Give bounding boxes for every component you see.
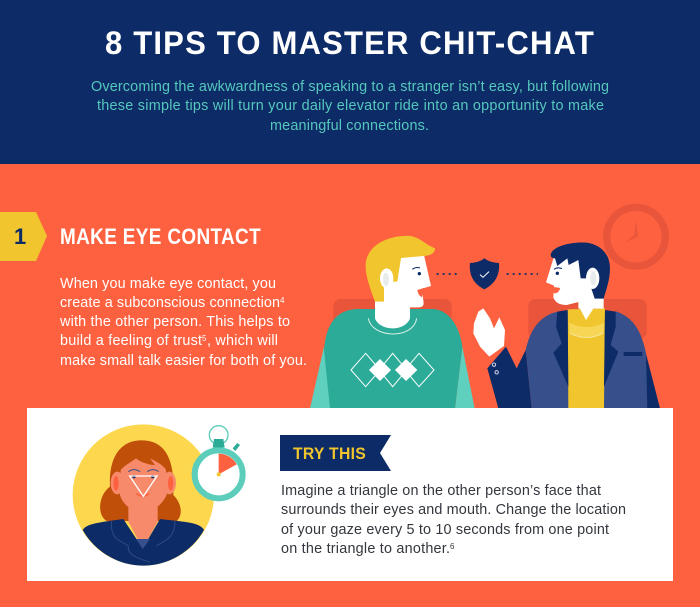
tip body text: , which will [207, 333, 278, 349]
title: 8 TIPS TO MASTER CHIT-CHAT [105, 25, 595, 61]
try this body text [281, 483, 626, 557]
panel: try this [27, 408, 673, 581]
tip body text: build a feeling of trust [60, 333, 202, 349]
label banner: try this: TRY THIS [293, 444, 366, 463]
icon: trust shield [470, 258, 499, 289]
icon: stopwatch [195, 426, 243, 498]
number badge [0, 212, 47, 261]
intro text: meaningful connections. [270, 118, 429, 134]
person: woman [83, 440, 204, 566]
portrait circle [73, 424, 214, 566]
sweater argyle pattern [351, 353, 434, 387]
heading: make eye contact: MAKE EYE CONTACT [60, 224, 261, 249]
tip body text: with the other person. This helps to [59, 314, 290, 330]
icon: wall clock [607, 207, 665, 266]
illustration: woman and stopwatch [73, 424, 243, 566]
try this body text: surrounds their eyes and mouth. Change the location [281, 502, 626, 518]
panel: header [0, 0, 700, 164]
tip body text: When you make eye contact, you [60, 276, 276, 292]
illustration: two people talking [310, 207, 665, 408]
chair backs [333, 299, 647, 339]
number badge: 1 [14, 224, 26, 249]
intro text: these simple tips will turn your daily elevator ride into an opportunity to make [97, 98, 604, 114]
dotted link right [507, 271, 538, 276]
try this body text: on the triangle to another. [281, 541, 450, 557]
label banner: try this [280, 435, 391, 471]
intro text: Overcoming the awkwardness of speaking to a stranger isn’t easy, but following [91, 79, 609, 95]
try this body text: of your gaze every 5 to 10 seconds from one point [281, 522, 609, 538]
intro text [91, 79, 609, 134]
tip body text: make small talk easier for both of you. [60, 353, 307, 369]
try this body text: Imagine a triangle on the other person’s face that [281, 483, 601, 499]
person: right man in blazer [473, 243, 660, 408]
dotted link left [437, 271, 461, 276]
tip body text [59, 276, 307, 369]
person: left man in sweater [310, 236, 475, 408]
tip body text: 4 [280, 296, 285, 305]
tip body text: create a subconscious connection [60, 295, 280, 311]
tip body text: 5 [202, 334, 207, 343]
try this body text: 6 [450, 542, 455, 551]
raised hand and cuff [473, 308, 532, 408]
